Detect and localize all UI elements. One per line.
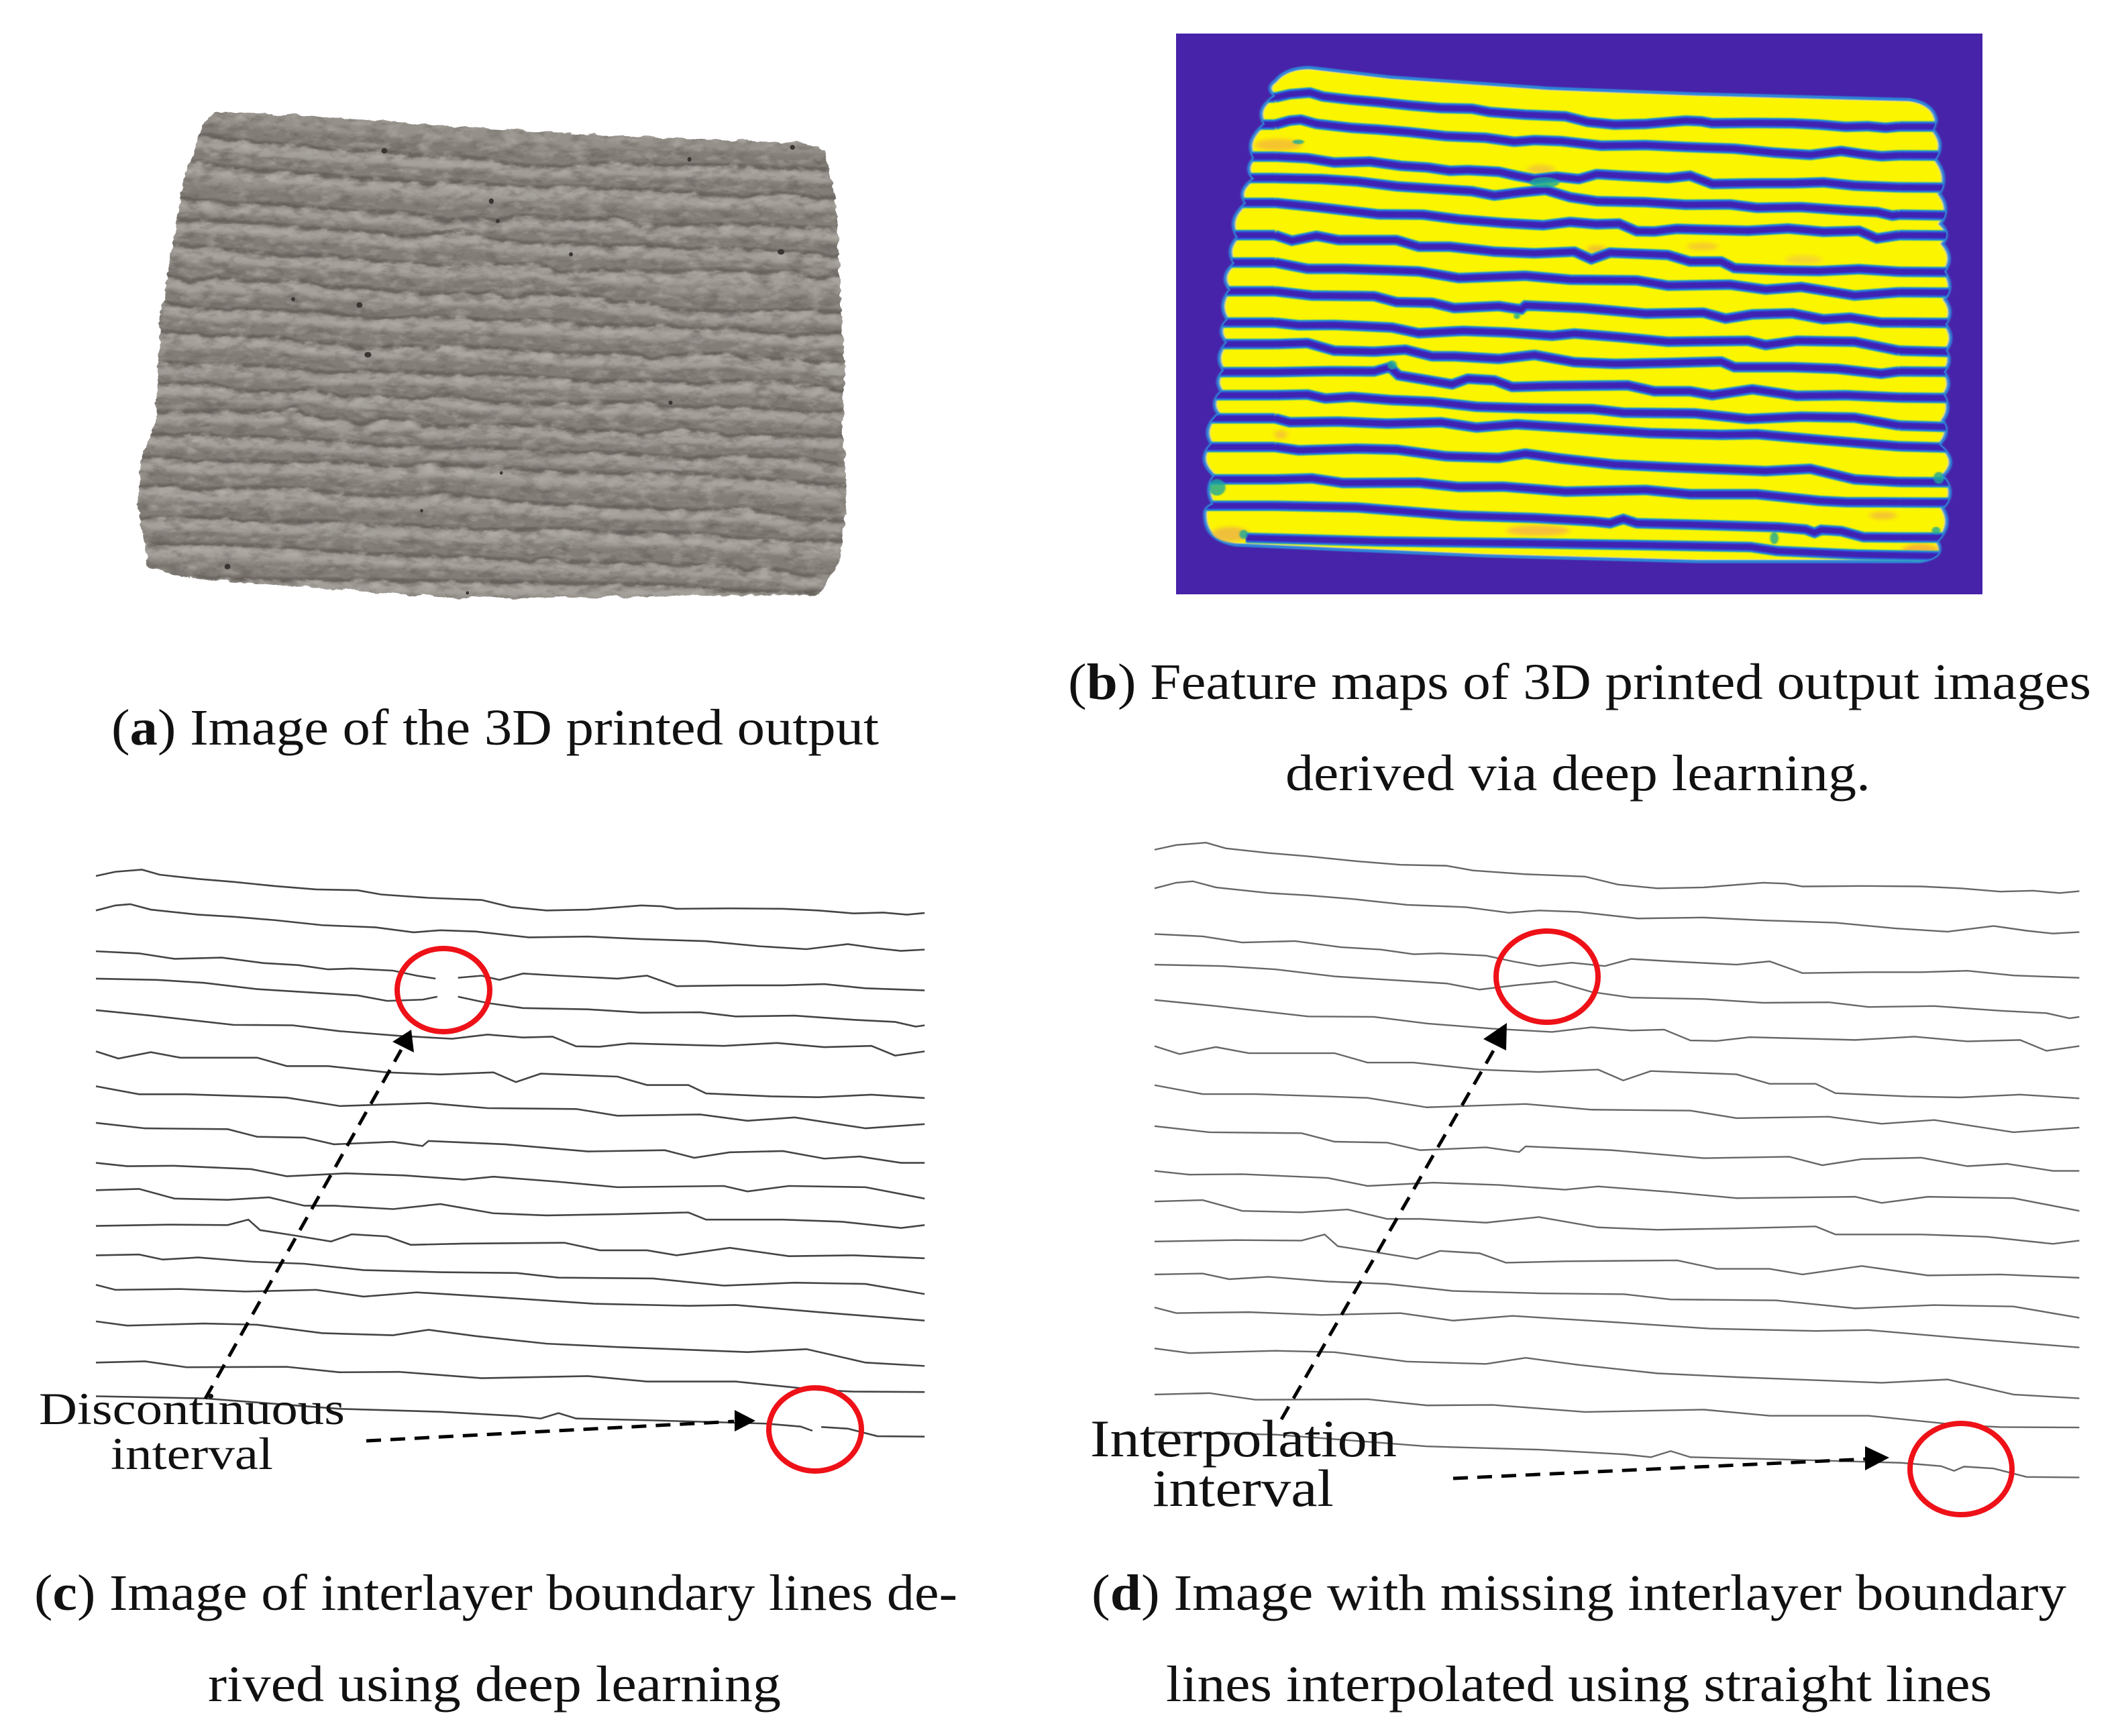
boundary lines c bbox=[96, 870, 924, 1437]
caption d: lines interpolated using straight lines bbox=[1166, 1656, 1992, 1713]
caption c: (c) Image of interlayer boundary lines de- bbox=[34, 1565, 890, 1621]
arrow: to lower interpolation d bbox=[1453, 1446, 1889, 1478]
caption a: (a) Image of the 3D printed output bbox=[111, 700, 879, 756]
caption c: rived using deep learning bbox=[208, 1656, 781, 1713]
panel c: interlayer boundary lines with gaps bbox=[39, 870, 924, 1479]
red circle: lower interpolation d bbox=[1910, 1423, 2012, 1515]
caption b: derived via deep learning. bbox=[1285, 745, 1870, 802]
label: interpolation interval: interval bbox=[1153, 1459, 1334, 1517]
panel b: deep learning feature map bbox=[1152, 34, 1988, 594]
label: discontinuous interval: Discontinuous bbox=[39, 1383, 345, 1434]
feature map background bbox=[1176, 34, 1982, 594]
panel d: interpolated boundary lines bbox=[1090, 843, 2079, 1517]
red circle: upper interpolation d bbox=[1496, 931, 1598, 1022]
icon: surface pores bbox=[225, 145, 795, 594]
arrow: to lower gap c bbox=[366, 1410, 755, 1441]
boundary lines d bbox=[1155, 843, 2079, 1478]
red circle: lower gap c bbox=[769, 1388, 861, 1471]
red circle: upper gap c bbox=[397, 948, 490, 1032]
caption b: (b) Feature maps of 3D printed output images bbox=[1068, 654, 2008, 710]
label: discontinuous interval: interval bbox=[111, 1428, 273, 1479]
label: interpolation interval: Interpolation bbox=[1090, 1409, 1397, 1468]
arrow: to upper interpolation d bbox=[1281, 1023, 1507, 1419]
feature map segmented print bbox=[1152, 68, 1988, 561]
caption d: (d) Image with missing interlayer boundary bbox=[1092, 1565, 1986, 1621]
panel a: photo of 3D printed output bbox=[137, 111, 847, 600]
arrow: to upper gap c bbox=[205, 1030, 414, 1399]
